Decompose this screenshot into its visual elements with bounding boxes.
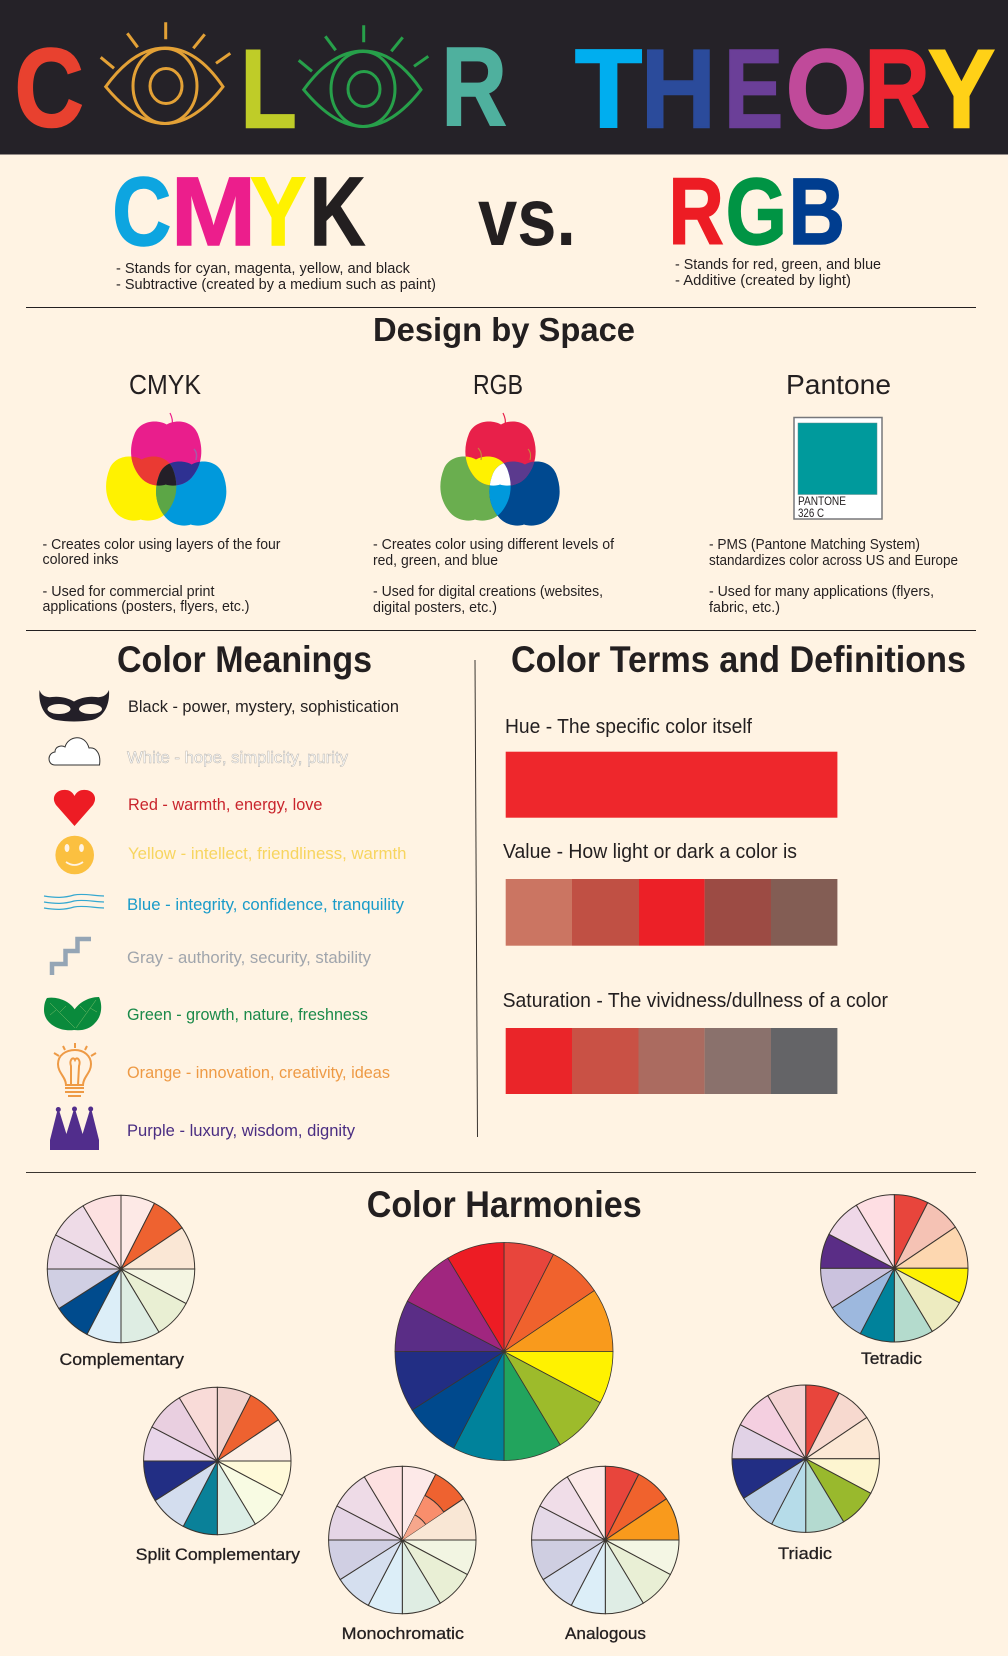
icon: Pantone swatch: 326 C: [798, 508, 824, 520]
text: purple: Purple - luxury, wisdom, dignity: [127, 1121, 355, 1140]
RGB description: - Additive (created by light): [675, 272, 851, 289]
heading: CMYK: K: [310, 157, 365, 266]
wheel: tetradic: [821, 1195, 968, 1342]
title: Color Theory: H: [641, 26, 716, 152]
label: complementary: Complementary: [60, 1350, 185, 1369]
wheel: analogous: [532, 1466, 679, 1614]
label: split complementary: Split Complementary: [136, 1545, 301, 1564]
wheel: monochromatic: [329, 1466, 476, 1614]
text: green: Green - growth, nature, freshness: [127, 1005, 368, 1024]
text: orange: Orange - innovation, creativity, ideas: [127, 1063, 390, 1082]
heading: vs.: vs.: [478, 172, 576, 263]
text: red: Red - warmth, energy, love: [128, 795, 322, 814]
wheel: complementary: [47, 1195, 195, 1343]
text: white: White - hope, simplicity, purity: [127, 748, 348, 767]
CMYK description: - Stands for cyan, magenta, yellow, and black: [116, 260, 410, 277]
text: gray: Gray - authority, security, stability: [127, 948, 371, 967]
swatches: value scale: [506, 879, 837, 946]
CMYK notes: - Creates color using layers of the four: [42, 536, 280, 553]
RGB description: - Stands for red, green, and blue: [675, 256, 881, 273]
title: Color Theory: O: [786, 26, 868, 152]
CMYK notes: - Used for commercial print: [42, 583, 215, 600]
heading: RGB: R: [668, 159, 724, 265]
Pantone notes: - Used for many applications (flyers,: [709, 583, 934, 600]
Pantone notes: fabric, etc.): [709, 599, 780, 616]
title: Color Theory: R: [441, 24, 507, 150]
heading: CMYK: [112, 157, 365, 266]
icon: green eye: [299, 25, 428, 126]
column: CMYK: [42, 369, 280, 615]
icon: CMYK apples: [106, 413, 226, 526]
heading: Color Meanings: Color Meanings: [117, 639, 372, 680]
wheel: triadic: [732, 1385, 879, 1532]
column: Pantone: [709, 369, 958, 616]
text: value definition: Value - How light or dark a color is: [503, 841, 797, 863]
heading: RGB: G: [726, 159, 787, 265]
icon: blue waves: [44, 894, 104, 909]
Pantone notes: [709, 536, 958, 616]
CMYK column heading: CMYK: [129, 369, 201, 400]
icon: gray stairs: [52, 939, 91, 975]
CMYK notes: applications (posters, flyers, etc.): [42, 598, 250, 615]
title: Color Theory: C: [14, 26, 84, 150]
heading: Design by Space: Design by Space: [373, 311, 635, 348]
heading: CMYK: C: [112, 157, 171, 266]
title: Color Theory: Y: [928, 26, 995, 152]
icon: orange eye: [101, 22, 230, 123]
header banner: [0, 0, 1008, 154]
icon: Pantone swatch: PANTONE: [798, 496, 846, 508]
CMYK notes: colored inks: [42, 551, 118, 568]
text: saturation definition: Saturation - The vividness/dullness of a color: [503, 990, 888, 1012]
text: black: Black - power, mystery, sophistication: [128, 697, 399, 716]
swatch: hue: [506, 752, 837, 818]
title: Color Theory: [14, 22, 995, 151]
text: blue: Blue - integrity, confidence, tranquility: [127, 895, 404, 914]
text: yellow: Yellow - intellect, friendliness, warmth: [128, 844, 406, 863]
column: RGB: [373, 369, 615, 616]
icon: red heart: [54, 790, 95, 826]
CMYK description: - Subtractive (created by a medium such as paint): [116, 276, 436, 293]
icon: yellow smiley: [55, 836, 94, 874]
Pantone notes: standardizes color across US and Europe: [709, 552, 958, 569]
CMYK notes: [42, 536, 280, 615]
label: triadic: Triadic: [778, 1544, 833, 1563]
wheel: full color wheel: [395, 1242, 613, 1460]
heading: RGB: B: [788, 159, 845, 265]
icon: green leaves: [44, 997, 101, 1030]
label: analogous: Analogous: [565, 1624, 646, 1643]
CMYK description: [116, 260, 436, 293]
title: Color Theory: T: [575, 26, 642, 152]
heading: RGB: [668, 159, 845, 265]
label: tetradic: Tetradic: [861, 1349, 923, 1368]
title: Color Theory: E: [724, 26, 783, 152]
icon: purple crown: [50, 1106, 99, 1150]
icon: RGB apples: [440, 413, 560, 526]
icon: white cloud: [49, 738, 100, 765]
icon: Pantone swatch: [794, 418, 882, 520]
panel: color harmonies: [47, 1184, 968, 1643]
RGB notes: digital posters, etc.): [373, 599, 497, 616]
RGB notes: red, green, and blue: [373, 552, 498, 569]
icon: black mask: [39, 690, 109, 722]
swatches: saturation scale: [506, 1028, 837, 1094]
title: Color Theory: R: [864, 26, 930, 152]
RGB notes: [373, 536, 615, 616]
heading: Color Terms and Definitions: Color Terms and Definitions: [511, 639, 966, 680]
heading: Color Harmonies: Color Harmonies: [367, 1184, 642, 1225]
Pantone column heading: Pantone: [786, 369, 891, 400]
title: Color Theory: L: [240, 26, 297, 152]
RGB notes: - Used for digital creations (websites,: [373, 583, 603, 600]
panel: color terms and definitions: [503, 639, 966, 1094]
heading: CMYK: Y: [250, 157, 306, 266]
wheel: split complementary: [144, 1387, 291, 1535]
text: hue definition: Hue - The specific color itself: [505, 716, 752, 738]
panel: color meanings: [39, 639, 406, 1150]
RGB description: [675, 256, 881, 289]
icon: orange light bulb: [54, 1043, 96, 1096]
RGB notes: - Creates color using different levels of: [373, 536, 615, 553]
label: monochromatic: Monochromatic: [342, 1624, 465, 1643]
heading: CMYK: M: [171, 157, 256, 266]
RGB column heading: RGB: [473, 369, 523, 400]
Pantone notes: - PMS (Pantone Matching System): [709, 536, 920, 553]
